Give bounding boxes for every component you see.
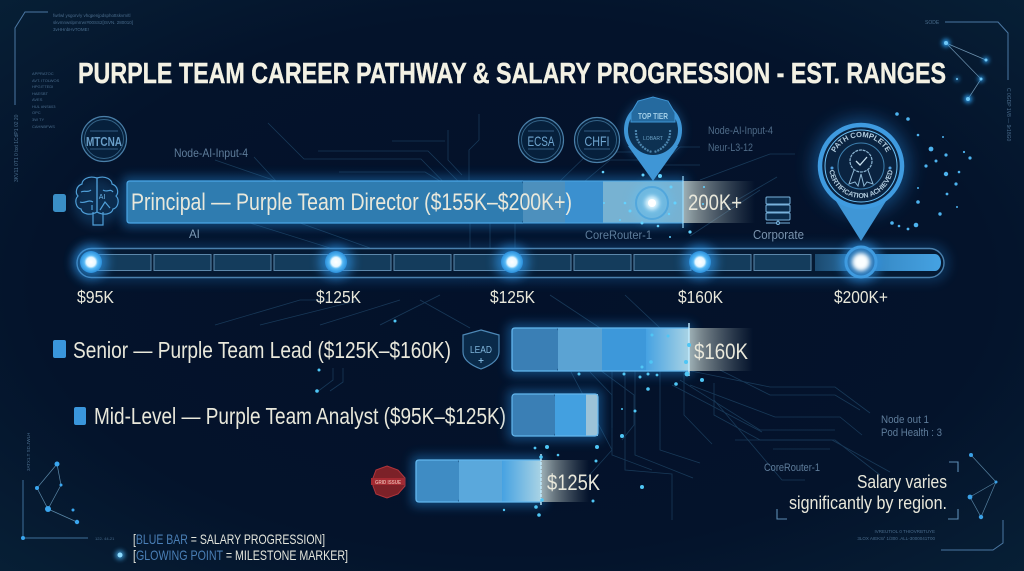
- icon: red Junior badge: GRID ISSUE: [375, 480, 401, 486]
- milestone node: $125K first: [319, 245, 353, 279]
- badge: ECSA: [518, 118, 564, 162]
- top-right hud bracket with constellation: [925, 20, 1011, 141]
- icon: Lead shield: [463, 330, 499, 369]
- scattered data particles: [890, 112, 972, 230]
- pin: Top Tier badge: LOBART: [643, 136, 663, 142]
- bar end value: 200K+: 200K+: [688, 190, 742, 215]
- timeline values: $95K: [77, 287, 114, 307]
- pin: Top Tier badge: TOP TIER: [638, 111, 668, 121]
- label: CoreRouter-1 top: CoreRouter-1: [585, 228, 652, 242]
- label: AI: AI: [189, 229, 200, 241]
- bottom-left constellation and axis: 3ATX1.T SD.JWLH: [26, 433, 31, 471]
- top-left hud bracket: 3KV11 0T1 0 bxt 1CdP1 02 20: [14, 114, 20, 182]
- timeline values: $125K: [316, 287, 361, 307]
- bottom-right constellation and bracket: [857, 453, 1003, 550]
- top-left hud bracket: HPGITTEDI: [32, 84, 53, 89]
- timeline: [72, 242, 950, 283]
- icon: red Junior badge: [371, 466, 405, 498]
- badge: ECSA: ECSA: [528, 133, 555, 149]
- bar particles: [315, 320, 704, 517]
- label: Node out / Pod Health: Node out 1: [881, 414, 929, 426]
- legend row: glowing point: [GLOWING POINT = MILESTONE MARKER]: [133, 547, 348, 563]
- legend row: blue bar: [BLUE BAR = SALARY PROGRESSION]: [133, 531, 325, 547]
- circuit traces: [215, 114, 890, 520]
- bar end value: $160K: $160K: [694, 339, 748, 364]
- badge: MTCNA: [82, 116, 126, 162]
- label: Corporate: Corporate: [753, 227, 804, 242]
- top-left hud bracket: 3vHHnbHvTOME!: [53, 27, 89, 32]
- timeline values: $200K+: [834, 287, 888, 307]
- top-left hud bracket: CAHNBFWS: [32, 124, 55, 129]
- marker: principal tier: [53, 194, 66, 212]
- top-left hud bracket: skvmnwslpmrrwr#00SS2[ISVN. 280010]: [53, 20, 133, 25]
- pin: Top Tier badge: [623, 97, 683, 181]
- bar: Senior: [507, 323, 753, 376]
- bar label: Principal: Principal — Purple Team Director ($155K–$200K+): [131, 189, 572, 216]
- milestone node: $125K second: [495, 245, 529, 279]
- bottom-left constellation and axis: [21, 433, 115, 541]
- timeline values: [77, 287, 888, 307]
- timeline values: $125K: [490, 287, 535, 307]
- legend: [115, 531, 348, 563]
- callout: salary varies: significantly by region.: [789, 492, 947, 513]
- label: Node-AI-Input-4 right: Node-AI-Input-4: [708, 125, 773, 137]
- glow point on Principal bar: [602, 171, 705, 238]
- icon: AI brain: [73, 177, 121, 226]
- bar: Principal: [122, 176, 755, 228]
- icon: server rack: [766, 197, 790, 224]
- top-left hud bracket: OPC: [32, 110, 41, 115]
- label: Neur-L3-12: Neur-L3-12: [708, 142, 753, 154]
- label: Node out / Pod Health: Pod Health : 3: [881, 427, 942, 439]
- icon: AI brain: AI: [99, 194, 105, 201]
- top-left hud bracket: HUL #NS603: [32, 104, 56, 109]
- callout: salary varies: Salary varies: [857, 471, 947, 492]
- timeline values: $160K: [678, 287, 723, 307]
- top-left hud bracket: fwrlwl ysgorv/y vhqpenjpdsphottskvm/tl: [53, 13, 131, 18]
- bottom-right constellation and bracket: IVREUTIOL 0 THIOVRBTUYE: [874, 529, 935, 534]
- badge: CHFI: CHFI: [584, 133, 610, 149]
- pin: path complete badge: PATH COMPLETE: [831, 132, 891, 152]
- top-right hud bracket with constellation: SODE: [925, 20, 940, 26]
- pin: path complete badge: CERTIFICATION ACHIEVED: [830, 170, 892, 198]
- bottom-right constellation and bracket: 3LOX AIEKS/' 1/300 .ALL-3000041T00: [857, 536, 935, 541]
- callout: salary varies: [777, 462, 958, 519]
- top-left hud bracket: APPRATOC: [32, 71, 54, 76]
- label: CoreRouter-1 bottom: CoreRouter-1: [764, 462, 820, 474]
- top-left hud bracket: 3W TY: [32, 117, 44, 122]
- bottom-left constellation and axis: 122- 44-21: [95, 536, 115, 541]
- milestone node: $200K+: [841, 242, 881, 282]
- top-left hud bracket: AVT. ITOLWOS: [32, 78, 60, 83]
- bar end value: $125K: $125K: [547, 470, 600, 495]
- milestone node: $160K: [683, 245, 717, 279]
- icon: Lead shield: LEAD: [470, 344, 492, 356]
- top-right hud bracket with constellation: C 0GDP 1V8 — 9r18G0: [1005, 88, 1011, 141]
- label: Node-AI-Input-4 left: Node-AI-Input-4: [174, 146, 248, 160]
- badge: CHFI: [574, 118, 620, 162]
- milestone node: $95K: [74, 245, 108, 279]
- label: Senior: Senior — Purple Team Lead ($125K–$160K): [73, 337, 451, 363]
- pin: path complete badge: [803, 108, 919, 241]
- badge: MTCNA: MTCNA: [86, 134, 122, 149]
- top-left hud bracket: HAESBT: [32, 91, 49, 96]
- top-left hud bracket: AVES: [32, 97, 43, 102]
- label: Mid-Level: Mid-Level — Purple Team Analyst ($95K–$125K): [94, 403, 506, 429]
- bar: Mid-Level: [507, 389, 603, 441]
- label: Node out / Pod Health: [881, 414, 942, 439]
- bar: Junior: [411, 454, 600, 507]
- top-left hud bracket: [14, 12, 133, 182]
